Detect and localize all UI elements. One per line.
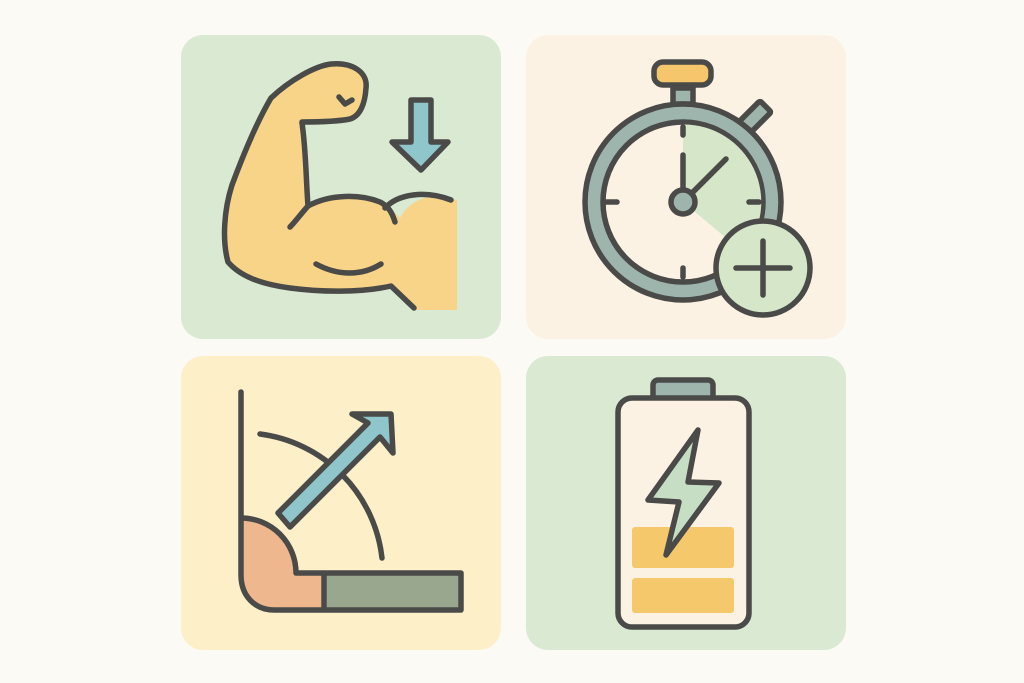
icon: battery cap <box>653 380 713 402</box>
arc <box>260 434 382 558</box>
icon: side button <box>739 101 771 133</box>
icon: stem <box>673 88 693 104</box>
charge bars <box>632 527 734 568</box>
panel: muscle <box>181 35 501 339</box>
panel: stopwatch <box>526 35 846 339</box>
icon: plus circle <box>716 221 810 315</box>
icon: joint base <box>241 392 461 610</box>
icon: lightning bolt <box>648 430 719 555</box>
icon: crown button <box>654 62 711 85</box>
icon: down arrow <box>392 100 448 170</box>
icon: flexed arm <box>225 64 457 310</box>
icon: diagonal arrow <box>278 414 393 527</box>
panel: battery <box>526 356 846 650</box>
icon: battery body <box>618 398 749 627</box>
icon: watch ring <box>585 104 781 300</box>
wedge <box>683 124 761 252</box>
panel: range of motion <box>181 356 501 650</box>
